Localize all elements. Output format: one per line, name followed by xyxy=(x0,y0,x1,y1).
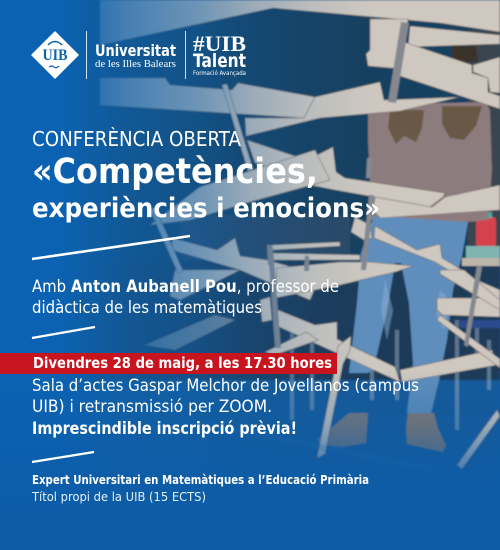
person jeans xyxy=(349,216,468,413)
bottle xyxy=(476,217,496,247)
post and diagonal pieces xyxy=(222,84,253,171)
board thin posts xyxy=(267,22,482,348)
location text: UIB) i retransmissió per ZOOM. xyxy=(32,397,272,417)
speaker text: didàctica de les matemàtiques xyxy=(32,298,262,318)
logo: #UIB Talent xyxy=(193,31,246,77)
middle wide board xyxy=(100,78,315,118)
title xyxy=(32,152,380,224)
wooden boards xyxy=(100,0,500,469)
logo wordmark: Universitat de les Illes Balears xyxy=(95,41,176,70)
logo wordmark: Universitat de les Illes Balears: Universitat xyxy=(95,41,176,60)
top board xyxy=(100,0,500,45)
speaker text: Amb Anton Aubanell Pou, professor de xyxy=(32,277,339,297)
logo divider 2 xyxy=(185,31,186,79)
title: «Competències, xyxy=(32,152,318,192)
logo: #UIB Talent: Talent xyxy=(193,50,246,72)
red date banner xyxy=(0,353,337,374)
logo: #UIB Talent: #UIB xyxy=(193,31,246,56)
logo wordmark: Universitat de les Illes Balears: de les Illes Balears xyxy=(95,59,176,70)
person shoes xyxy=(318,413,368,447)
footer programme text xyxy=(31,473,369,504)
location text xyxy=(32,376,419,439)
heading: conferència oberta: CONFERÈNCIA OBERTA xyxy=(32,127,241,151)
red date banner: Divendres 28 de maig, a les 17.30 hores xyxy=(33,354,332,372)
lower boards xyxy=(275,310,400,382)
person hair xyxy=(388,106,482,144)
divider line 2 xyxy=(32,327,95,338)
footer programme text: Títol propi de la UIB (15 ECTS) xyxy=(31,489,206,504)
logo: UIB diamond xyxy=(32,32,78,78)
person cardigan xyxy=(368,102,492,222)
divider line 3 xyxy=(32,452,94,462)
logo: UIB diamond: UIB xyxy=(42,47,68,64)
logo divider 1 xyxy=(86,31,87,79)
footer programme text: Expert Universitari en Matemàtiques a l’Educació Primària xyxy=(32,473,369,487)
speaker text xyxy=(32,277,339,318)
left low board xyxy=(172,238,320,300)
title: experiències i emocions» xyxy=(32,193,380,224)
location text: Imprescindible inscripció prèvia! xyxy=(32,419,297,439)
cushion and table xyxy=(466,246,500,258)
bottom blue gradient overlay xyxy=(0,370,500,550)
logo: #UIB Talent: Formació Avançada xyxy=(193,69,246,77)
chair legs xyxy=(290,290,491,430)
divider line 1 xyxy=(32,236,190,259)
floor reflections xyxy=(200,420,500,486)
location text: Sala d’actes Gaspar Melchor de Jovellanos (campus xyxy=(32,376,419,396)
